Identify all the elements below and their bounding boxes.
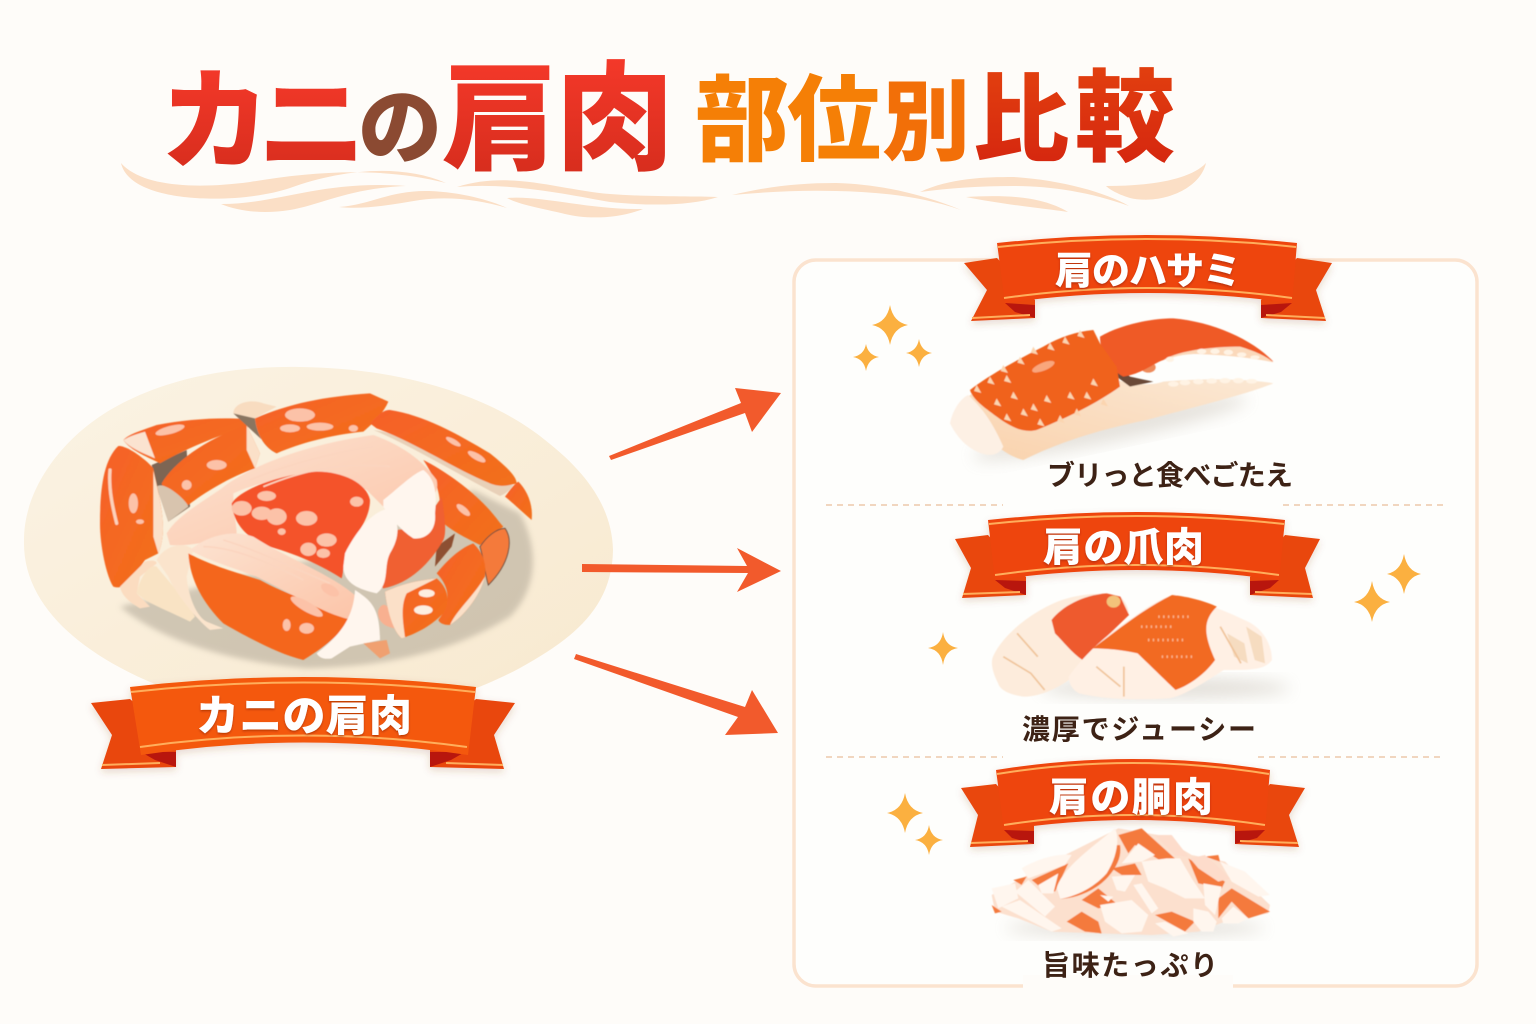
title: カニの肩肉: 肉 — [556, 54, 674, 186]
ribbon: 肩のハサミ: 肩のハサミ — [1055, 251, 1241, 293]
panel: whole crab shoulder — [24, 367, 613, 769]
ribbon: 肩の爪肉 — [955, 512, 1320, 598]
illustration: flaked body meat — [992, 828, 1270, 937]
ribbon: 肩のハサミ — [964, 235, 1332, 321]
title: カニの肩肉: 肩 — [442, 55, 558, 185]
meat shadow — [1005, 920, 1265, 936]
arrow: to 肩のハサミ — [609, 388, 781, 460]
shell speckles and highlights — [110, 408, 487, 634]
title — [121, 54, 1206, 217]
illustration: claw meat — [992, 593, 1272, 699]
title: カニの肩肉: ニ — [258, 65, 366, 186]
title: 部位別比較: 比 — [973, 67, 1069, 174]
ribbon: カニの肩肉: カニの肩肉 — [196, 693, 412, 741]
section: 肩の爪肉 — [928, 512, 1421, 745]
arrow: to 肩の胴肉 — [574, 654, 778, 735]
crab shadow — [120, 490, 533, 668]
crab legs — [100, 393, 532, 638]
ribbon: 肩の爪肉: 肩の爪肉 — [1043, 526, 1204, 570]
title: 部位別比較 — [695, 63, 1175, 175]
meat shadow — [1040, 678, 1290, 698]
ribbon: カニの肩肉 — [91, 677, 515, 769]
ribbon: 肩の胴肉: 肩の胴肉 — [1049, 776, 1213, 820]
section: 肩のハサミ — [853, 235, 1332, 491]
illustration: claw — [950, 318, 1273, 460]
arrow: to 肩の爪肉 — [582, 548, 781, 592]
panel frame — [794, 260, 1477, 986]
title: カニの肩肉: カ — [160, 61, 270, 184]
cream blob backdrop — [24, 367, 613, 718]
sparkles — [928, 554, 1421, 665]
arrows — [574, 388, 781, 735]
ribbon: 肩の胴肉 — [961, 759, 1305, 847]
caption: 旨味たっぷり: 旨味たっぷり — [1042, 950, 1218, 981]
sparkles — [853, 305, 932, 371]
title: 部位別比較: 位 — [787, 68, 881, 173]
sparkles — [887, 793, 943, 855]
claw shadow — [970, 385, 1250, 471]
caption: 濃厚でジューシー: 濃厚でジューシー — [1022, 714, 1256, 745]
title: カニの肩肉: の — [358, 81, 442, 175]
section: 肩の胴肉 — [887, 759, 1305, 981]
caption: ブリっと食べごたえ: ブリっと食べごたえ — [1047, 459, 1293, 491]
title: 部位別比較: 較 — [1075, 63, 1175, 175]
illustration: crab shoulder — [100, 393, 533, 668]
title: カニの肩肉 — [160, 54, 674, 186]
title: 部位別比較: 部 — [695, 68, 789, 173]
crab body meat — [157, 435, 445, 660]
title: 部位別比較: 別 — [882, 73, 970, 172]
panel: parts comparison — [794, 235, 1477, 995]
title wave decoration — [121, 163, 1206, 217]
